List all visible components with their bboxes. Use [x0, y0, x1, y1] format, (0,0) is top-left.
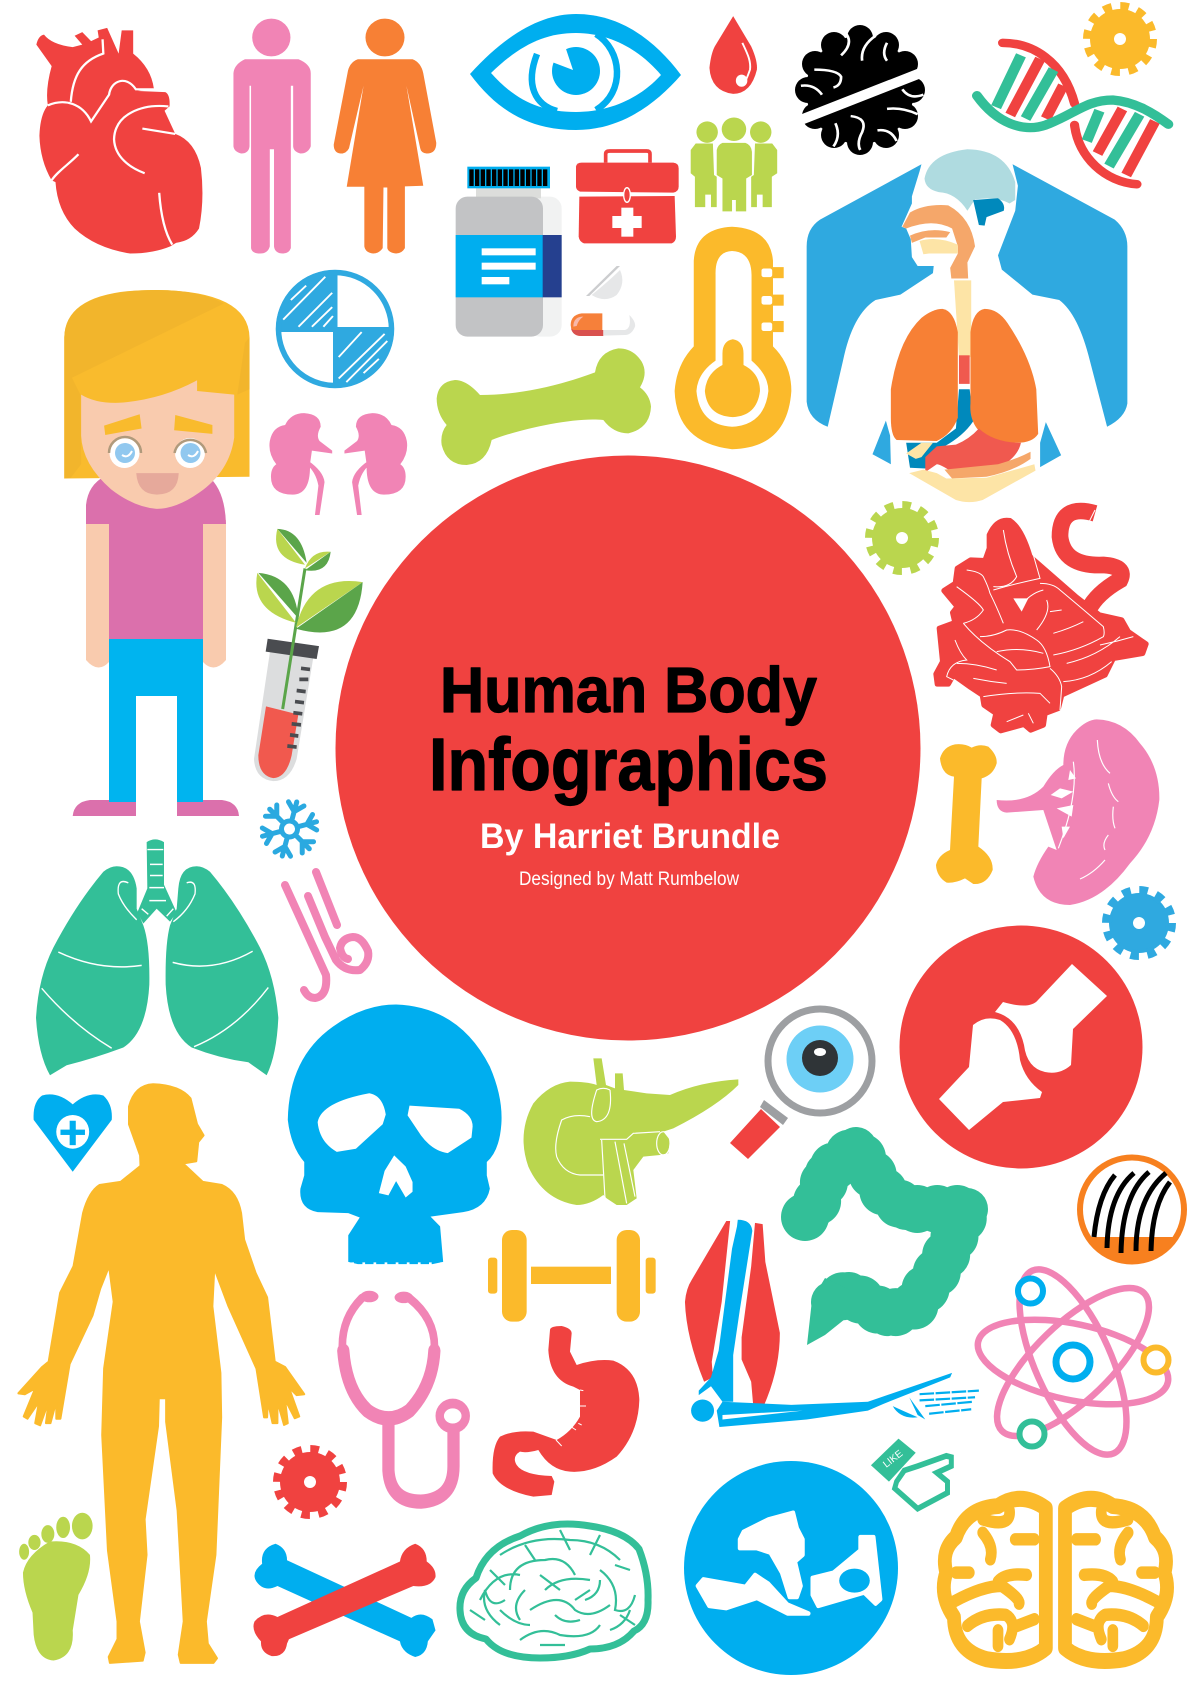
icon: man figure: [233, 19, 311, 254]
icon: test tube with plant: [254, 529, 363, 781]
icon: magnifying glass with eye: [730, 1009, 872, 1159]
girl: shirt: [86, 476, 226, 639]
icon: atom: [970, 1255, 1176, 1469]
icon: stethoscope: [342, 1291, 466, 1502]
icon: group of people: [691, 117, 777, 211]
icon: thermometer: [675, 227, 791, 449]
icon: heart with cross: [34, 1094, 112, 1172]
girl: eyes: [109, 437, 206, 468]
icon: yellow brain: [944, 1499, 1167, 1661]
title: [429, 654, 828, 806]
icon: hatched pie circle: [276, 270, 394, 388]
icon: medicine bottle: [456, 167, 562, 337]
title circle panel: [336, 456, 920, 1040]
icon: teal brain outline: [460, 1524, 648, 1658]
icon: joint in red circle: [900, 926, 1142, 1168]
girl: head: [64, 290, 250, 509]
icon: anatomical heart: [36, 28, 202, 254]
icon: intestines: [936, 510, 1146, 731]
icon: blue circle with pelvis bones: [684, 1461, 898, 1675]
icon: colon: [805, 1148, 967, 1345]
designer credit: Designed by Matt Rumbelow: [519, 869, 739, 890]
icon: black brain: [795, 25, 929, 155]
icon: green foot: [19, 1513, 93, 1661]
icon: snowflake: [260, 800, 319, 858]
icon: hair follicle: [1080, 1158, 1184, 1262]
icon: green bone: [437, 348, 651, 465]
icon: pills: [571, 266, 635, 336]
girl: legs and shoes: [73, 639, 239, 816]
icon: stomach: [493, 1326, 639, 1497]
icon: eye: [470, 14, 681, 130]
title: Infographics: [429, 723, 828, 806]
girl: arms: [86, 520, 226, 668]
icon: green gear: [870, 506, 934, 570]
title: Human Body: [440, 654, 817, 726]
icon: yellow human silhouette: [18, 1084, 304, 1663]
icon: torso with organs: [807, 149, 1127, 502]
icon: blood drop: [709, 16, 757, 94]
icon: green lungs: [36, 839, 278, 1075]
icon: yellow bone: [936, 744, 997, 884]
icon: thumbs up like: LIKE: [881, 1448, 905, 1470]
icon: spleen: [997, 719, 1159, 905]
icon: blue gear: [1107, 891, 1171, 955]
icon: kidneys: [269, 413, 407, 515]
icon: muscle arm: [685, 1220, 979, 1427]
icon: red gear: [278, 1450, 342, 1514]
icon: skull: [288, 1004, 502, 1264]
icon: wind: [285, 872, 368, 998]
icon: DNA helix: [977, 43, 1168, 184]
icon: woman figure: [334, 19, 436, 254]
icon: crossed bones: [253, 1544, 436, 1657]
icon: first aid kit: [576, 151, 679, 243]
author: By Harriet Brundle: [480, 817, 780, 856]
icon: yellow gear: [1088, 7, 1152, 71]
icon: thumbs up like: [871, 1439, 951, 1509]
icon: dumbbell: [488, 1230, 656, 1322]
icon: pancreas: [524, 1058, 738, 1205]
character: girl: [64, 290, 250, 816]
